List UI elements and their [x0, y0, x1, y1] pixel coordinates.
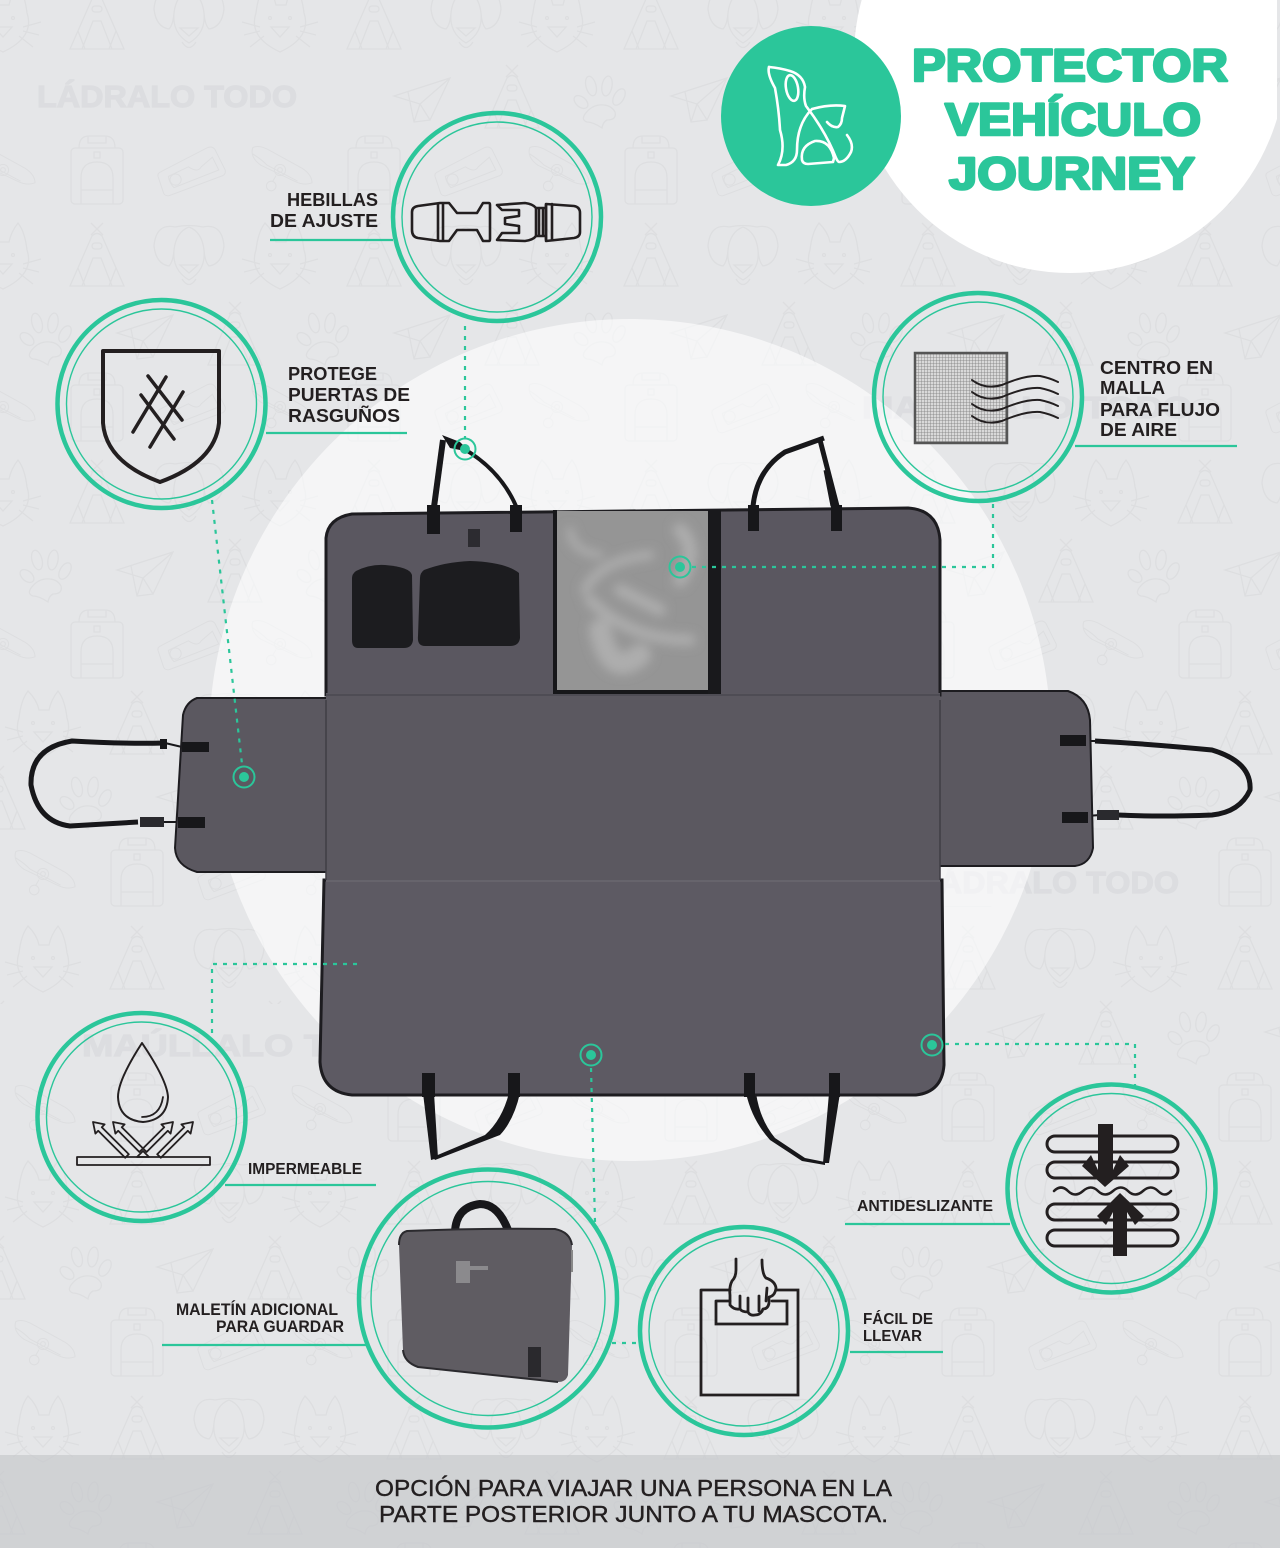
marker: malla — [670, 556, 690, 578]
product: left flap strap — [31, 739, 182, 827]
label — [288, 364, 410, 426]
product: fold lines — [326, 695, 940, 881]
label: RASGUÑOS — [288, 405, 400, 426]
callout: maletin adicional — [162, 1170, 617, 1428]
marker: puertas — [234, 766, 254, 788]
watermark: maullalo todo lower left: MAÚLLALO TODO — [82, 1027, 412, 1063]
label — [270, 190, 378, 231]
label: MALLA — [1100, 378, 1165, 398]
watermark: ladralo todo lower right — [900, 848, 1190, 906]
icon: shield — [103, 351, 219, 482]
watermark: maullalo todo lower left — [0, 1004, 420, 1068]
label: MALETÍN ADICIONAL — [176, 1300, 338, 1319]
footer text — [375, 1475, 893, 1527]
callout: antideslizante — [845, 1084, 1216, 1292]
product: label tag — [468, 529, 480, 547]
watermark: maullalo todo centre right: MAÚLLALO TODO — [862, 389, 1192, 425]
watermark: ladralo todo top left — [0, 58, 392, 130]
footer text: OPCIÓN PARA VIAJAR UNA PERSONA EN LA — [375, 1475, 893, 1501]
icon: layers and arrows — [1047, 1124, 1178, 1256]
product: left flap — [175, 698, 328, 872]
ring — [393, 113, 601, 321]
callout: protege puertas — [58, 300, 410, 508]
product: middle panel — [326, 693, 940, 881]
product: strap tabs — [178, 505, 1088, 1097]
product: bottom left strap — [423, 1093, 520, 1160]
footer text: PARTE POSTERIOR JUNTO A TU MASCOTA. — [379, 1501, 888, 1527]
product: right flap — [937, 691, 1093, 866]
label: DE AJUSTE — [270, 211, 378, 231]
ring — [1008, 1084, 1216, 1292]
watermark: ladralo todo top left: LÁDRALO TODO — [37, 79, 297, 114]
underline — [266, 432, 407, 434]
ring — [38, 1013, 246, 1221]
product: lower panel — [320, 880, 944, 1095]
callout: impermeable — [38, 1013, 376, 1221]
marker: antideslizante — [922, 1034, 942, 1056]
label — [176, 1300, 344, 1336]
header: white shape — [854, 0, 1280, 273]
label: PUERTAS DE — [288, 385, 410, 405]
product: left handle — [434, 435, 516, 507]
marker: hebillas — [454, 438, 476, 460]
product: mesh panel — [554, 510, 709, 692]
background icon pattern upper — [0, 0, 1280, 685]
underline — [850, 1351, 943, 1353]
underline — [162, 1344, 368, 1346]
central light circle — [209, 319, 1051, 1161]
underline — [1075, 445, 1237, 447]
title: VEHÍCULO — [945, 94, 1201, 145]
product: large pocket — [418, 561, 520, 646]
underline — [845, 1223, 1010, 1225]
dotted connectors — [212, 326, 1135, 1343]
icon: buckle — [412, 203, 580, 241]
product: right handle — [753, 438, 837, 506]
label: HEBILLAS — [287, 190, 378, 210]
product: seat cover — [31, 435, 1250, 1165]
title: JOURNEY — [949, 148, 1195, 199]
label: IMPERMEABLE — [248, 1161, 362, 1178]
label — [863, 1309, 933, 1345]
ring — [359, 1170, 617, 1428]
label: PROTEGE — [288, 364, 377, 384]
underline — [270, 239, 393, 241]
callout: centro en malla — [874, 293, 1237, 501]
label: PARA FLUJO — [1100, 400, 1220, 420]
label: PARA GUARDAR — [216, 1317, 344, 1336]
icon: mesh — [915, 353, 1058, 443]
title — [912, 40, 1228, 199]
product: bottom right strap — [746, 1093, 840, 1165]
marker: maletin — [580, 1044, 602, 1066]
watermark: maullalo todo centre right — [855, 372, 1192, 430]
footer band — [0, 1455, 1280, 1548]
callout: facil de llevar — [640, 1227, 943, 1435]
label: DE AIRE — [1100, 420, 1177, 440]
ring — [874, 293, 1082, 501]
ring — [640, 1227, 848, 1435]
underline — [225, 1184, 376, 1186]
product: zipper strip — [708, 510, 721, 694]
watermark: ladralo todo lower right: LÁDRALO TODO — [919, 865, 1179, 900]
icon: hand holding bag — [701, 1259, 798, 1395]
background icon pattern lower — [0, 685, 1280, 1548]
label: FÁCIL DE — [863, 1309, 933, 1328]
label: LLEVAR — [863, 1328, 922, 1345]
product: small pocket — [352, 565, 413, 648]
icon: carry bag — [399, 1204, 572, 1382]
header: logo badge — [721, 26, 901, 206]
product: upper panel — [326, 508, 940, 695]
callout: hebillas de ajuste — [270, 113, 601, 321]
label: CENTRO EN — [1100, 358, 1213, 378]
title: PROTECTOR — [912, 40, 1228, 91]
label — [1100, 358, 1220, 440]
product: right flap strap — [1085, 741, 1250, 820]
icon: water drop — [77, 1043, 210, 1165]
ring — [58, 300, 266, 508]
label: ANTIDESLIZANTE — [857, 1198, 993, 1215]
